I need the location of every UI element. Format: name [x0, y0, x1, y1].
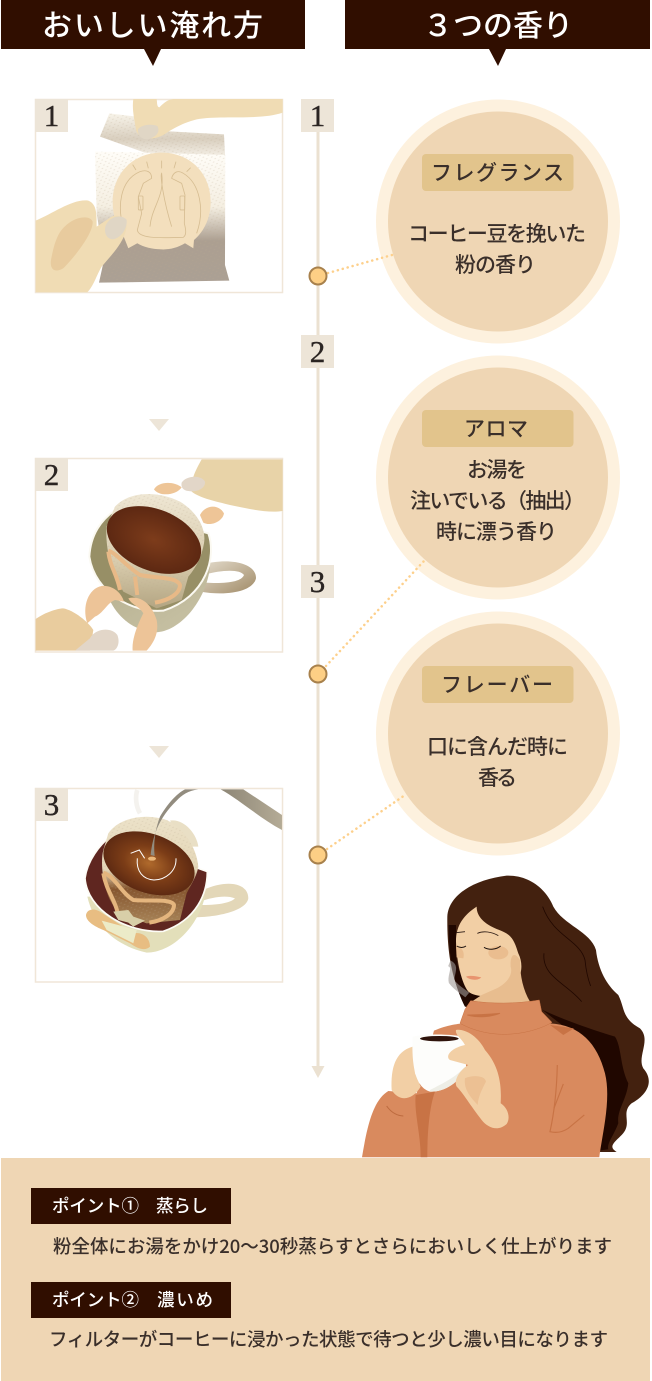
panel: fragrance circle: コーヒー豆を挽いた: [408, 223, 586, 246]
timeline marker 2: 2: [310, 334, 325, 369]
step number 1: [35, 98, 68, 133]
heading: three aromas: [345, 0, 650, 66]
illustration: filter bag and fingers: [36, 99, 283, 292]
panel: aroma circle: お湯を: [467, 459, 527, 482]
step number 1: 1: [44, 98, 59, 133]
panel: flavor circle: フレーバー: [441, 674, 553, 697]
label: point 1: ポイント①: [52, 1196, 139, 1216]
step number 3: [35, 787, 68, 822]
illustration: woman smelling coffee: [362, 876, 649, 1157]
panel: step 1 illustration: [35, 98, 283, 292]
timeline marker 3: 3: [310, 564, 325, 599]
label: point 2: ポイント②: [52, 1290, 139, 1310]
heading: how to brew: おいしい淹れ方: [42, 10, 263, 43]
connector: marker 1 to fragrance: [310, 255, 392, 284]
label: point 1: 蒸らし: [156, 1196, 208, 1216]
connector: marker 2 to aroma: [310, 561, 424, 682]
panel: step 2 illustration: [35, 457, 283, 652]
text: point 2 description: フィルターがコーヒーに浸かった状態で待つと少し濃い目になります: [49, 1326, 608, 1352]
panel: flavor circle: 口に含んだ時に: [427, 736, 568, 759]
text: point 1 description: 粉全体にお湯をかけ20～30秒蒸らすとさらにおいしく仕上がります: [53, 1233, 612, 1259]
panel: flavor circle: 香る: [478, 767, 517, 790]
label: point 2: 濃いめ: [157, 1290, 213, 1310]
panel: aroma circle: 注いでいる（抽出）: [410, 490, 585, 513]
illustration: bag set on cup: [36, 459, 283, 651]
step number 2: 2: [44, 457, 59, 492]
step number 2: [35, 457, 68, 492]
label: point 2: [31, 1282, 231, 1318]
panel: step 3 illustration: [35, 787, 282, 982]
panel: aroma circle: [376, 356, 620, 600]
label: point 1: [31, 1188, 231, 1224]
step number 3: 3: [44, 787, 59, 822]
heading: three aromas: ３つの香り: [423, 10, 573, 43]
timeline marker 2: [301, 334, 334, 369]
panel: fragrance circle: フレグランス: [431, 162, 564, 185]
panel: fragrance circle: [376, 100, 620, 344]
arrow: step 2 to 3: [149, 746, 169, 758]
connector: marker 3 to flavor: [310, 795, 405, 864]
panel: brewing points: [1, 1158, 650, 1381]
heading: how to brew: [1, 0, 305, 66]
panel: fragrance circle: 粉の香り: [455, 254, 536, 277]
panel: aroma circle: 時に漂う香り: [436, 521, 557, 544]
timeline: [301, 98, 334, 1078]
timeline marker 3: [301, 564, 334, 599]
illustration: pouring hot water: [85, 789, 282, 953]
arrow: step 1 to 2: [149, 419, 169, 431]
panel: flavor circle: [376, 612, 620, 856]
timeline marker 1: 1: [310, 98, 325, 133]
timeline marker 1: [301, 98, 334, 133]
panel: aroma circle: アロマ: [464, 418, 528, 441]
